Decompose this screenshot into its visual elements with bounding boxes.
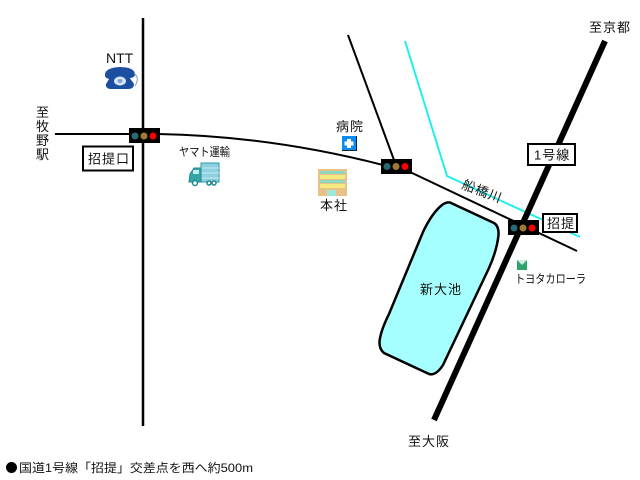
label: 至牧野駅 <box>36 105 50 162</box>
pond: 新大池: 新大池 <box>420 282 462 297</box>
icon: hospital <box>342 136 356 150</box>
label: トヨタカローラ: トヨタカローラ <box>515 272 586 286</box>
icon: telephone NTT <box>105 50 137 89</box>
traffic light: 招提口 <box>129 128 160 143</box>
label: 至牧野駅: 至 <box>36 105 50 120</box>
road: national route 1 <box>434 41 605 420</box>
road: east section <box>410 172 577 251</box>
label: 至大阪: 至大阪 <box>408 434 450 449</box>
label: 至牧野駅: 野 <box>36 133 50 148</box>
label: 病院: 病院 <box>336 119 364 134</box>
traffic light: 招提 <box>508 220 539 235</box>
label box: 招提口 <box>83 146 133 170</box>
label box: 1号線 <box>528 144 575 165</box>
icon: head office building <box>318 169 347 196</box>
label box: 招提口: 招提口 <box>88 152 130 166</box>
label box: 1号線: 1号線 <box>534 148 570 162</box>
icon: telephone NTT: NTT <box>106 50 134 66</box>
label: 本社: 本社 <box>320 198 348 213</box>
river: 船橋川 <box>405 41 580 237</box>
label: 至京都: 至京都 <box>589 20 631 35</box>
label: 至牧野駅: 牧 <box>36 119 50 134</box>
directions note: 国道1号線「招提」交差点を西へ約500m <box>19 460 253 475</box>
road: west approach <box>55 133 132 135</box>
label box: 招提 <box>543 214 577 232</box>
label: 至牧野駅: 駅 <box>36 147 50 162</box>
traffic light: centre <box>381 159 412 174</box>
icon: truck <box>189 163 219 186</box>
pond: 新大池 <box>380 202 499 374</box>
road: curved east-west <box>158 134 383 165</box>
label box: 招提: 招提 <box>547 216 575 231</box>
icon: Toyota Corolla marker <box>517 260 527 270</box>
road: north-west branch <box>348 35 394 160</box>
road: vertical north-south <box>142 18 144 426</box>
label: 船橋川: 船橋川 <box>460 177 505 206</box>
label: ヤマト運輸: ヤマト運輸 <box>179 145 230 159</box>
